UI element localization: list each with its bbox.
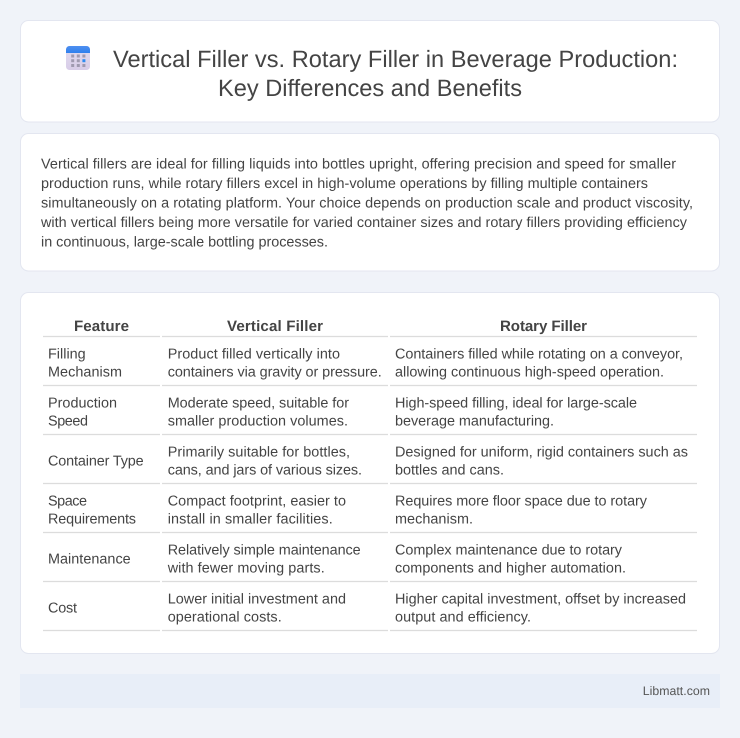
text block: introduction paragraph: simultaneously on a rotating platform. Your choice depends on production scale and product viscosity,	[41, 195, 693, 211]
panel: introduction	[20, 134, 720, 271]
text block: introduction paragraph: in continuous, large-scale bottling processes.	[41, 234, 328, 250]
table row: Production Speed: Moderate speed, suitable for	[168, 395, 349, 411]
title	[113, 47, 678, 102]
table row: Cost: operational costs.	[168, 609, 282, 625]
table row: Maintenance: Complex maintenance due to rotary	[395, 542, 623, 558]
table row: Filling Mechanism: containers via gravity or pressure.	[168, 364, 382, 380]
text block: introduction paragraph: production runs, while rotary fillers excel in high-volume operations by filling multiple containers	[41, 176, 648, 192]
panel: header	[20, 20, 720, 122]
table row: Production Speed: Speed	[48, 413, 88, 429]
table row: Container Type: Designed for uniform, rigid containers such as	[395, 444, 688, 460]
table row: Maintenance: with fewer moving parts.	[167, 560, 325, 576]
table row: Filling Mechanism: Product filled vertically into	[168, 346, 340, 362]
table header row: Vertical Filler	[227, 318, 323, 335]
table header row: Rotary Filler	[500, 318, 587, 335]
table row: Production Speed: beverage manufacturing.	[395, 413, 554, 429]
table row: Cost: Cost	[48, 600, 77, 616]
table row: Space Requirements: Requirements	[48, 511, 136, 527]
table row: Maintenance: components and higher automation.	[395, 560, 626, 576]
table row: Filling Mechanism: Containers filled while rotating on a conveyor,	[395, 346, 683, 362]
icon: calendar	[66, 46, 90, 70]
table header row: Feature	[74, 318, 129, 335]
table row: Container Type: Container Type	[48, 453, 144, 469]
table row: Filling Mechanism: Filling	[48, 346, 86, 362]
table row: Container Type: bottles and cans.	[395, 462, 504, 478]
table row: Cost: Higher capital investment, offset by increased	[395, 591, 686, 607]
title: Key Differences and Benefits	[218, 76, 522, 102]
table row: Maintenance: Relatively simple maintenance	[168, 542, 361, 558]
table row: Container Type: cans, and jars of various sizes.	[168, 462, 362, 478]
table row: Cost	[48, 591, 686, 625]
table row: Space Requirements: Space	[48, 493, 87, 509]
text block: introduction paragraph: with vertical fillers being more versatile for varied container sizes and rotary fillers providing efficiency	[40, 215, 688, 231]
table row: Production Speed	[48, 395, 637, 429]
table row: Container Type	[48, 444, 688, 478]
text block: introduction paragraph	[40, 156, 693, 250]
table row: Maintenance: Maintenance	[48, 551, 131, 567]
table row: Filling Mechanism	[48, 346, 683, 380]
text block: introduction paragraph: Vertical fillers are ideal for filling liquids into bottles upright, offering precision and speed for smaller	[41, 156, 676, 172]
table row: Production Speed: Production	[48, 395, 117, 411]
table header row	[74, 318, 587, 335]
table row: Maintenance	[48, 542, 626, 576]
footer	[20, 674, 720, 708]
table row: Container Type: Primarily suitable for bottles,	[168, 444, 350, 460]
table row: Space Requirements: install in smaller facilities.	[168, 511, 333, 527]
table row: Production Speed: High-speed filling, ideal for large-scale	[395, 395, 637, 411]
table row: Filling Mechanism: Mechanism	[48, 364, 122, 380]
table row: Production Speed: smaller production volumes.	[168, 413, 348, 429]
panel: comparison table	[20, 292, 720, 654]
table row: Space Requirements: Compact footprint, easier to	[168, 493, 346, 509]
table row: Cost: output and efficiency.	[395, 609, 531, 625]
table row: Space Requirements: mechanism.	[395, 511, 473, 527]
table row: Space Requirements	[48, 493, 648, 527]
footer: Libmatt.com	[643, 684, 710, 698]
table row: Cost: Lower initial investment and	[168, 591, 346, 607]
title: Vertical Filler vs. Rotary Filler in Beverage Production:	[113, 47, 678, 73]
table row: Filling Mechanism: allowing continuous high-speed operation.	[395, 364, 664, 380]
table row: Space Requirements: Requires more floor space due to rotary	[395, 493, 648, 509]
